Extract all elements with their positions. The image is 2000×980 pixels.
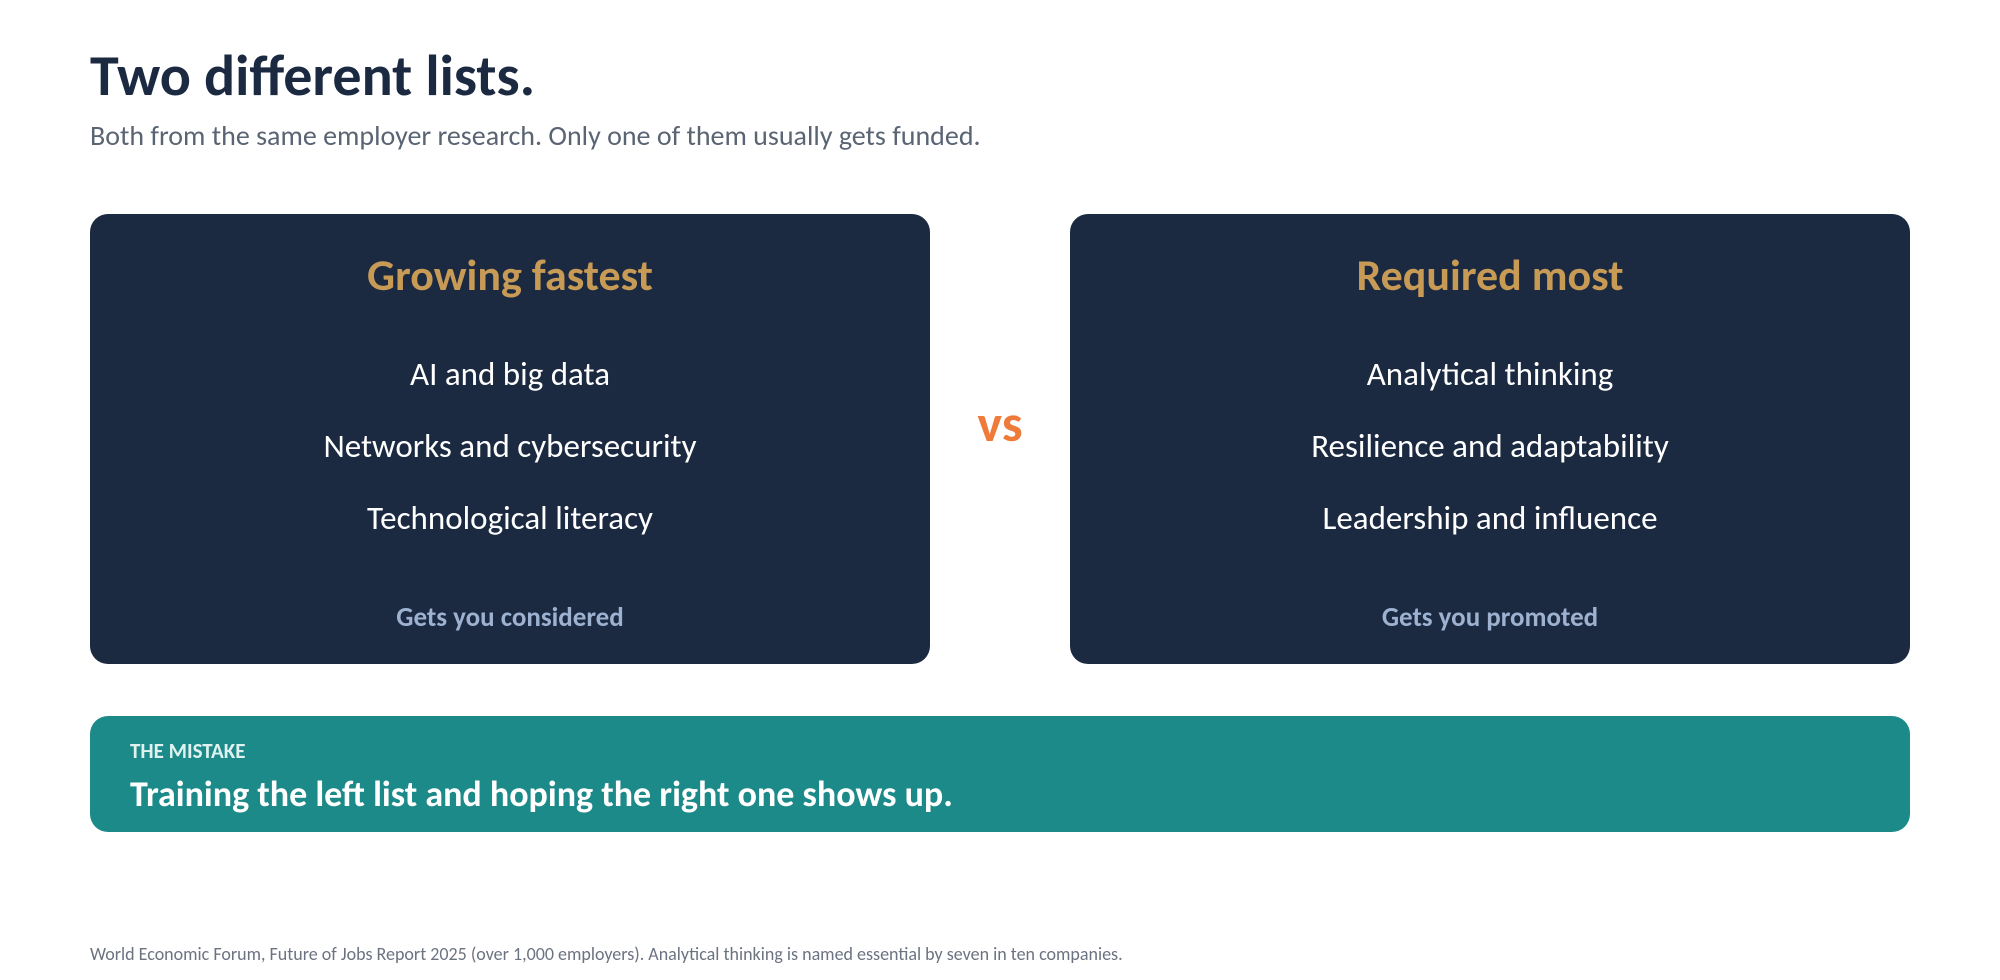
callout statement: Training the left list and hoping the right one shows up. <box>130 772 953 816</box>
panel footer: gets you considered: Gets you considered <box>396 601 624 634</box>
list item: analytical thinking: Analytical thinking <box>1367 354 1613 394</box>
panel: required most <box>1070 214 1910 664</box>
panel heading: growing fastest: Growing fastest <box>367 248 653 302</box>
callout label: THE MISTAKE <box>130 738 246 764</box>
subtitle: Both from the same employer research. Only one of them usually gets funded. <box>90 118 981 153</box>
list item: AI and big data: AI and big data <box>410 354 610 394</box>
vs label: vs <box>977 391 1023 455</box>
panel heading: required most: Required most <box>1357 248 1623 302</box>
source note: World Economic Forum, Future of Jobs Report 2025 (over 1,000 employers). Analytical thinking is named essential by seven in ten companies. <box>90 943 1123 965</box>
list item: technological literacy: Technological literacy <box>367 498 653 538</box>
list item: networks and cybersecurity: Networks and cybersecurity <box>323 426 697 466</box>
panel: growing fastest <box>90 214 930 664</box>
list item: resilience and adaptability: Resilience and adaptability <box>1311 426 1669 466</box>
panel footer: gets you promoted: Gets you promoted <box>1382 601 1598 634</box>
list item: leadership and influence: Leadership and influence <box>1322 498 1658 538</box>
callout: the mistake <box>90 716 1910 832</box>
title: Two different lists. <box>90 40 535 111</box>
